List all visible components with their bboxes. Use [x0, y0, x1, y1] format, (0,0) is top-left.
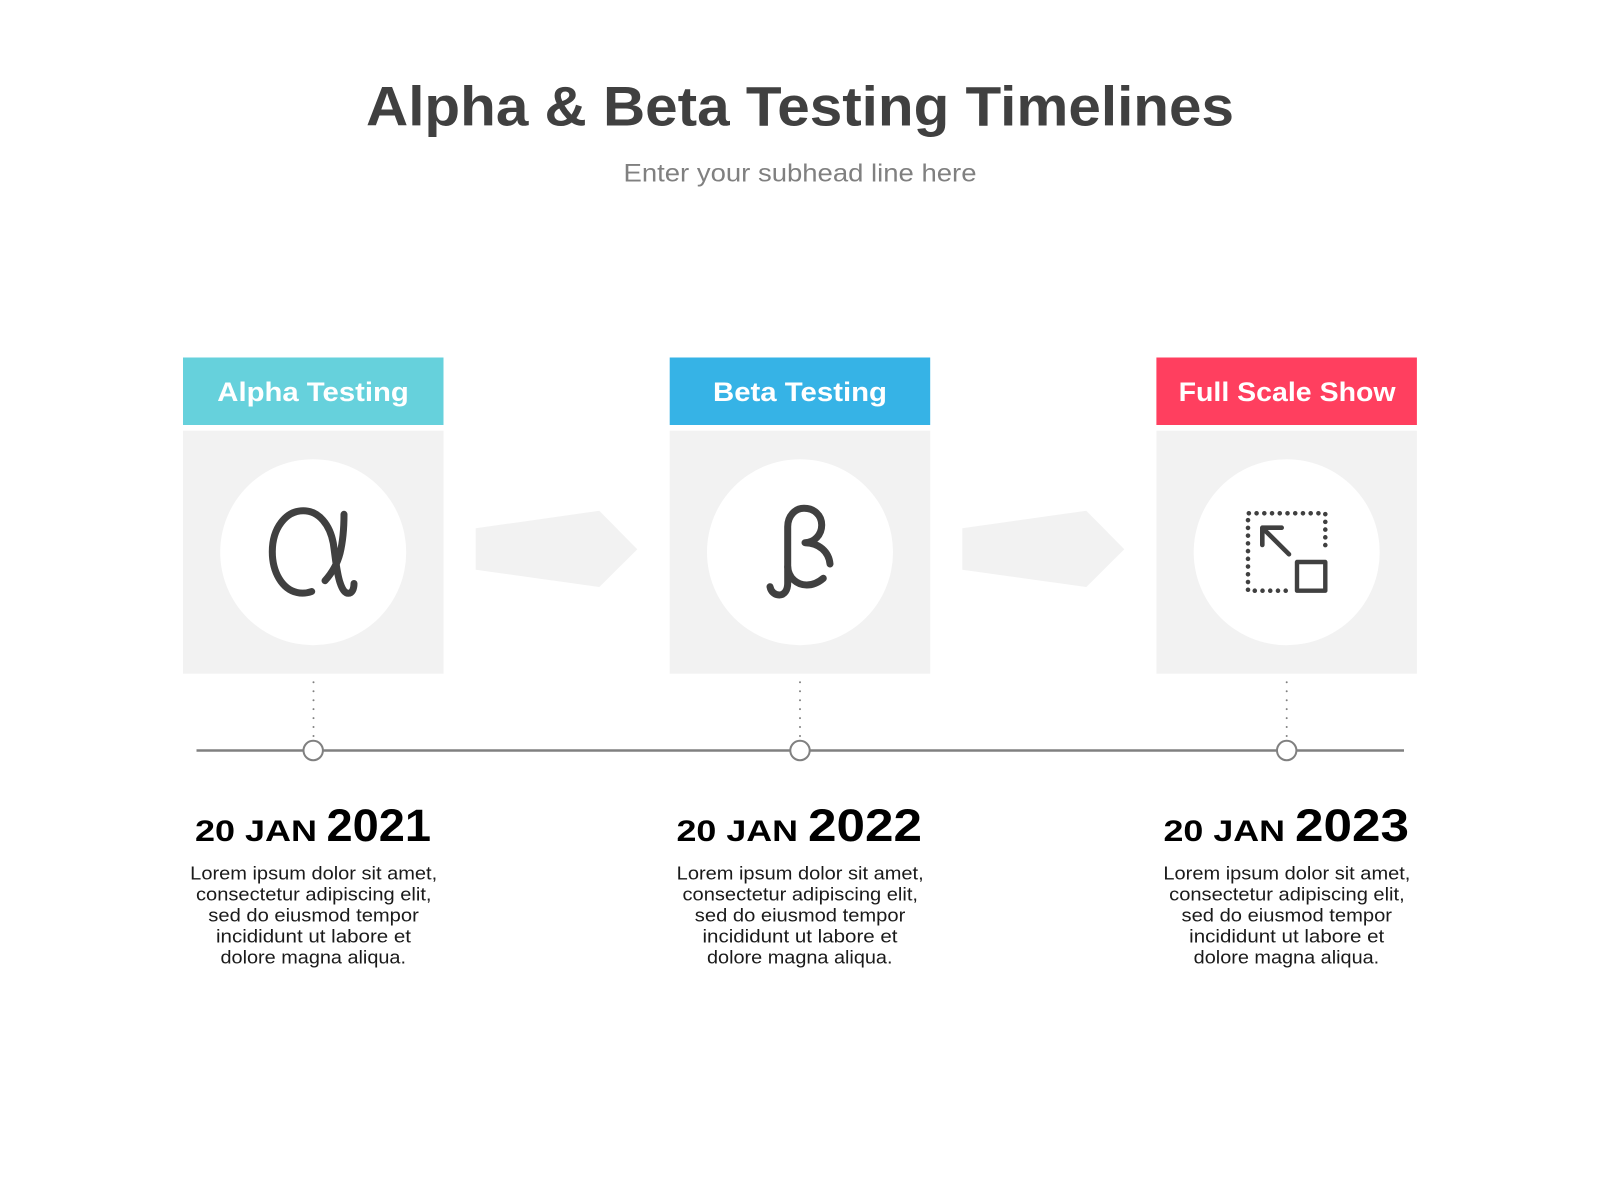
arrow: beta to full scale [962, 511, 1124, 587]
milestone 2023 [1163, 682, 1410, 967]
header: full scale show: Full Scale Show [1179, 377, 1397, 407]
marker [1277, 741, 1296, 760]
description: dolore magna aliqua. [220, 946, 406, 967]
connector [1286, 682, 1288, 738]
date: 20 JAN [1164, 815, 1285, 848]
date: 20 JAN [676, 815, 798, 848]
arrow: alpha to beta [476, 511, 637, 587]
connector [799, 682, 801, 738]
header: alpha testing [183, 358, 444, 425]
description: consectetur adipiscing elit, [196, 884, 432, 905]
description: sed do eiusmod tempor [1182, 904, 1392, 926]
milestone 2022 [676, 682, 924, 967]
header: full scale show [1156, 358, 1417, 425]
date: 2023 [1295, 800, 1409, 851]
description: incididunt ut labore et [702, 925, 898, 946]
date [676, 800, 922, 851]
description: incididunt ut labore et [216, 925, 411, 946]
connector [312, 682, 314, 738]
description: sed do eiusmod tempor [208, 904, 419, 926]
header: beta testing: Beta Testing [713, 377, 887, 407]
milestone 2021 [190, 682, 437, 967]
description: Lorem ipsum dolor sit amet, [677, 863, 924, 884]
title: Alpha & Beta Testing Timelines [366, 74, 1234, 138]
description: dolore magna aliqua. [707, 946, 892, 967]
panel: alpha testing [183, 358, 444, 674]
description [1163, 863, 1410, 967]
description: consectetur adipiscing elit, [1169, 884, 1405, 905]
description [677, 863, 924, 967]
description: consectetur adipiscing elit, [682, 884, 918, 905]
date: 2022 [808, 800, 922, 851]
panel: full scale show [1156, 358, 1417, 674]
subheading: Enter your subhead line here [624, 160, 976, 188]
date: 20 JAN [195, 815, 317, 848]
date [195, 800, 431, 851]
icon card: beta [670, 431, 930, 674]
marker [790, 741, 810, 760]
panel: beta testing [670, 358, 930, 674]
description: Lorem ipsum dolor sit amet, [190, 863, 437, 884]
header: beta testing [670, 358, 930, 425]
description: sed do eiusmod tempor [695, 904, 905, 926]
icon card: resize [1156, 431, 1417, 674]
icon card: alpha [183, 431, 444, 674]
description: dolore magna aliqua. [1194, 946, 1379, 967]
marker [304, 741, 323, 760]
header: alpha testing: Alpha Testing [217, 377, 409, 407]
description: incididunt ut labore et [1189, 925, 1384, 946]
date: 2021 [326, 800, 431, 851]
description [190, 863, 437, 967]
timeline axis [196, 749, 1404, 752]
date [1164, 800, 1409, 851]
description: Lorem ipsum dolor sit amet, [1163, 863, 1410, 884]
